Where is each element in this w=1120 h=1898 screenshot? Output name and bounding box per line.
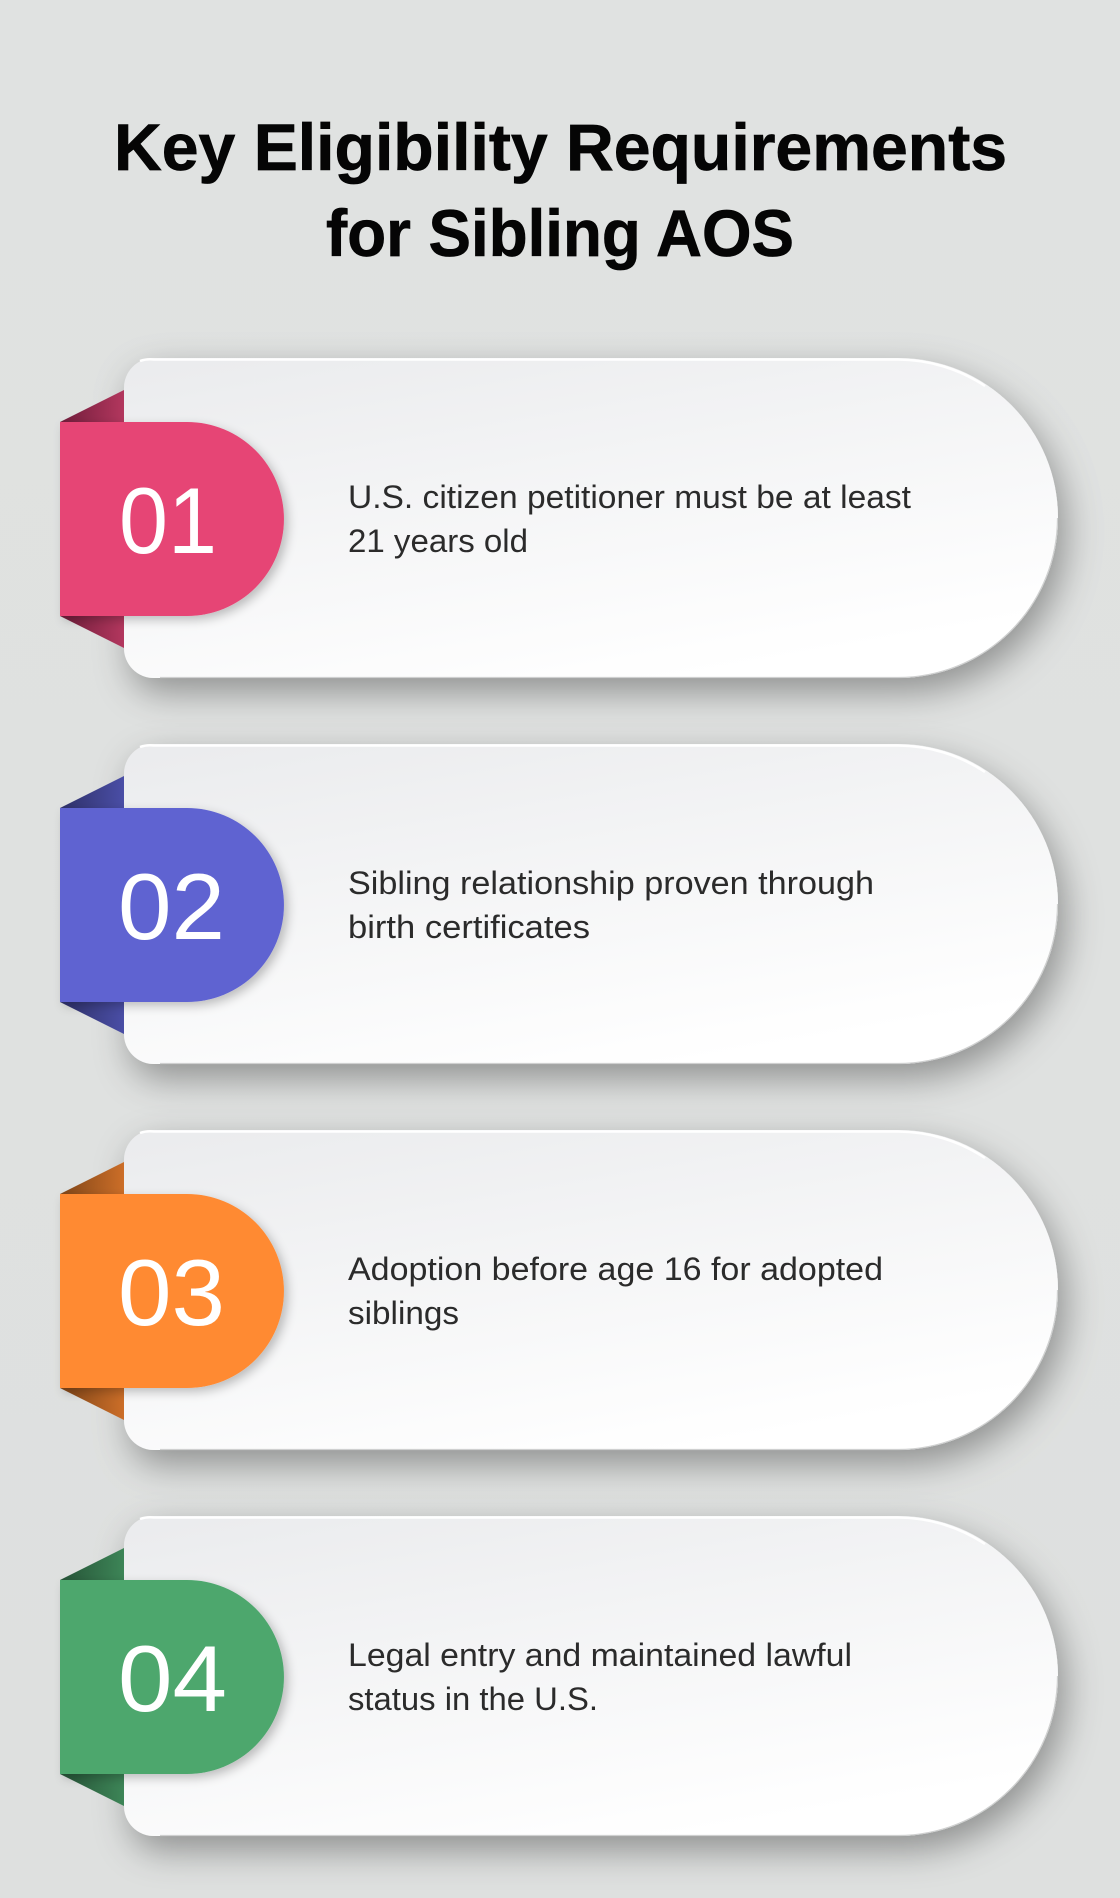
title: for Sibling AOS (326, 196, 794, 270)
card background (124, 358, 1058, 678)
panel: requirement 03 (60, 1130, 1058, 1450)
requirement text: Legal entry and maintained lawful (348, 1637, 852, 1673)
requirement text: U.S. citizen petitioner must be at least (348, 479, 911, 515)
card background (124, 744, 1058, 1064)
requirement text (348, 1251, 883, 1331)
title (114, 110, 1007, 270)
number badge: 03 (118, 1240, 225, 1345)
ribbon folds (60, 1162, 124, 1420)
ribbon folds (60, 390, 124, 648)
requirement text (348, 479, 911, 559)
requirement text: siblings (348, 1295, 459, 1331)
number badge: 04 (118, 1626, 227, 1731)
number badge: 02 (118, 854, 225, 959)
number badge (60, 1580, 284, 1774)
number badge (60, 422, 284, 616)
panel: requirement 02 (60, 744, 1058, 1064)
title: Key Eligibility Requirements (114, 110, 1007, 184)
requirement text: status in the U.S. (348, 1681, 598, 1717)
number badge (60, 808, 284, 1002)
card background (124, 1516, 1058, 1836)
ribbon folds (60, 776, 124, 1034)
number badge (60, 1194, 284, 1388)
requirement text (348, 1637, 852, 1717)
requirement text (348, 865, 874, 945)
card background (124, 1130, 1058, 1450)
number badge: 01 (119, 468, 217, 573)
requirement text: birth certificates (348, 909, 590, 945)
panel: requirement 04 (60, 1516, 1058, 1836)
panel: requirement 01 (60, 358, 1058, 678)
ribbon folds (60, 1548, 124, 1806)
requirement text: Sibling relationship proven through (348, 865, 874, 901)
requirement text: Adoption before age 16 for adopted (348, 1251, 883, 1287)
requirement text: 21 years old (348, 523, 528, 559)
